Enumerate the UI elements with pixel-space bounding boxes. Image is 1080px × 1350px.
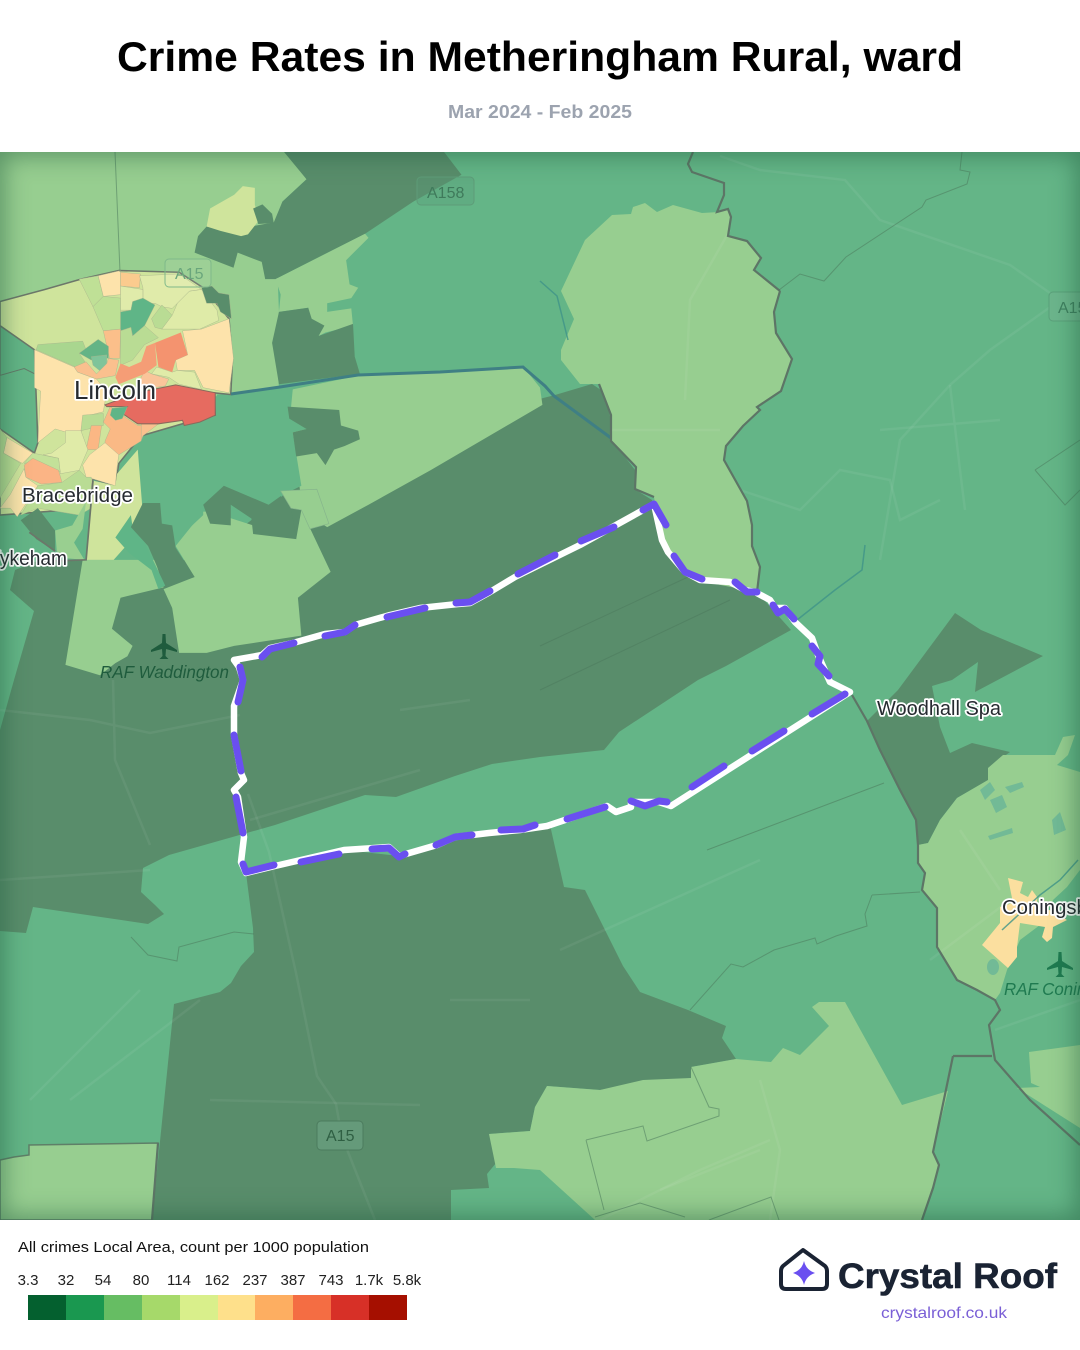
- legend scale labels: 54: [95, 1272, 111, 1289]
- region: far east light area: [1017, 1045, 1080, 1128]
- legend title: All crimes Local Area, count per 1000 population: [18, 1239, 369, 1256]
- ward outline white: [234, 504, 850, 873]
- logo wordmark: Crystal Roof: [838, 1257, 1057, 1296]
- Lincoln city wards: [0, 271, 234, 517]
- map vignette: [0, 152, 1080, 1220]
- legend scale labels: 5.8k: [393, 1272, 422, 1289]
- choropleth map: [0, 150, 1080, 1220]
- road shield: A15 north: A15: [175, 266, 204, 283]
- region: dark patch by river: [272, 308, 360, 384]
- region: south-west of Lincoln pieces: [21, 508, 55, 551]
- ward dashes purple: [234, 504, 845, 872]
- region: west side greens: [0, 326, 34, 376]
- legend scale labels: 743: [318, 1272, 344, 1289]
- region: dark strip: [203, 486, 296, 539]
- icon: airfield Coningsby: [1047, 952, 1073, 977]
- region: north-east light area: [561, 203, 792, 592]
- road shield: A15 north: [165, 259, 211, 287]
- legend scale labels: 80: [133, 1272, 149, 1289]
- legend scale labels: 387: [280, 1272, 306, 1289]
- label: RAF Waddington: RAF Waddington: [100, 662, 229, 682]
- region: south-centre light: [164, 510, 331, 653]
- stream: [540, 281, 1078, 930]
- subtitle: date range: Mar 2024 - Feb 2025: [448, 101, 632, 122]
- legend scale labels: [18, 1272, 422, 1289]
- Lincoln area drawn in zoomed coordinates: [0, 150, 542, 675]
- logo url: crystalroof.co.uk: [881, 1305, 1008, 1322]
- region: north-west light: [0, 150, 307, 396]
- label: Bracebridge: Bracebridge: [22, 485, 133, 507]
- region: light box: [281, 489, 329, 529]
- faint roads: [0, 156, 1080, 1220]
- legend scale labels: 3.3: [18, 1272, 38, 1289]
- region: dark patch east: [288, 407, 360, 465]
- region: Woodhall Spa low-crime area: [867, 613, 1043, 845]
- legend scale labels: 32: [58, 1272, 74, 1289]
- region: light patch north-centre: [276, 234, 369, 336]
- road shield: A15 south: [317, 1121, 363, 1150]
- river: [231, 367, 611, 438]
- region: south-western light area: [0, 1143, 158, 1220]
- region: Coningsby ponds: [980, 782, 1066, 975]
- region: south of river light: [289, 367, 542, 527]
- legend scale labels: 237: [242, 1272, 268, 1289]
- region: Coningsby light area: [918, 735, 1080, 1000]
- place labels: [0, 375, 1080, 919]
- region: pale patch north: [207, 186, 260, 236]
- icon: Crystal Roof logo house: [781, 1250, 827, 1289]
- ward: highest crime red: [105, 385, 215, 426]
- road shield: A158: [417, 177, 474, 205]
- parish lines: [115, 152, 1080, 1220]
- district boundaries: [152, 152, 1080, 1220]
- road shield: A15 south: A15: [326, 1128, 355, 1145]
- label: Lincoln: Lincoln: [74, 375, 156, 405]
- title: Crime Rates in Metheringham Rural, ward: [117, 33, 963, 80]
- region: southern low-crime area: [152, 825, 736, 1220]
- region: Coningsby town: [982, 878, 1067, 968]
- legend scale labels: 114: [167, 1272, 191, 1289]
- road shield: A15 east: [1049, 292, 1080, 321]
- region: mid-green south of Lincoln: [192, 392, 306, 526]
- legend scale labels: 162: [204, 1272, 230, 1289]
- icon: airfield Waddington: [151, 634, 177, 659]
- region: south-eastern light area: [489, 1002, 948, 1220]
- road shield: A158: A158: [427, 185, 464, 202]
- legend colour bar: [28, 1295, 407, 1320]
- label: Woodhall Spa: Woodhall Spa: [877, 698, 1002, 720]
- region: strip west of Waddington: [65, 560, 164, 675]
- region: north low-crime band: [195, 150, 461, 279]
- legend scale labels: 1.7k: [355, 1272, 384, 1289]
- ward boundary: Metheringham Rural: [234, 504, 850, 873]
- region: central and western low-crime areas: [0, 384, 791, 933]
